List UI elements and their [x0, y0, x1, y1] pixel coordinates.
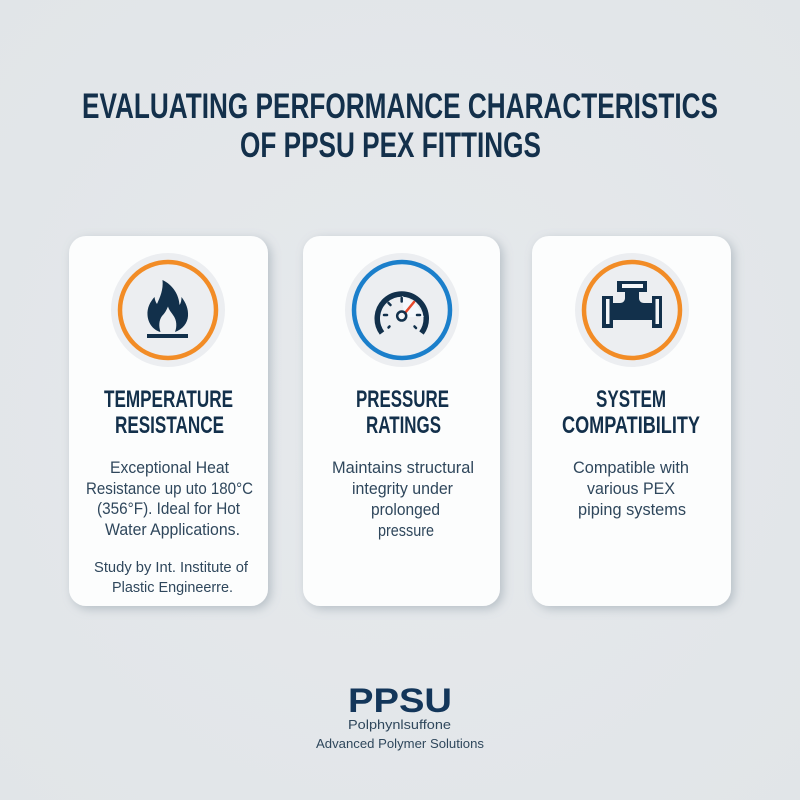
heading — [104, 386, 233, 439]
panel: pressure ratings — [303, 236, 500, 606]
heading: TEMPERATURE — [104, 386, 233, 413]
heading: RATINGS — [366, 412, 441, 439]
description: prolonged — [371, 500, 440, 519]
card background — [69, 236, 268, 606]
description: Compatible with — [573, 458, 689, 477]
panel: temperature resistance — [69, 236, 268, 606]
description — [332, 458, 474, 540]
heading: SYSTEM — [596, 386, 666, 413]
title — [82, 86, 718, 165]
icon: pipe tee fitting in orange ring — [575, 253, 689, 367]
heading — [356, 386, 449, 439]
description: Maintains structural — [332, 458, 474, 477]
study note — [94, 559, 249, 596]
card background — [303, 236, 500, 606]
heading: COMPATIBILITY — [562, 412, 700, 439]
material name: Polphynlsuffone — [348, 717, 451, 732]
icon: pressure gauge in blue ring — [345, 253, 459, 367]
panel: system compatibility — [532, 236, 731, 606]
description: Exceptional Heat — [110, 458, 229, 477]
description: integrity under — [352, 479, 453, 498]
description: Resistance up uto 180°C — [86, 479, 253, 498]
description: (356°F). Ideal for Hot — [97, 499, 240, 518]
description: various PEX — [587, 479, 675, 498]
heading — [562, 386, 700, 439]
description — [86, 458, 253, 539]
heading: RESISTANCE — [115, 412, 224, 439]
description: piping systems — [578, 500, 686, 519]
title: OF PPSU PEX FITTINGS — [240, 125, 541, 165]
heading: PRESSURE — [356, 386, 449, 413]
description: pressure — [378, 521, 434, 540]
logo wordmark: PPSU — [348, 682, 452, 720]
card background — [532, 236, 731, 606]
icon: flame in orange ring — [111, 253, 225, 367]
footer logo block — [316, 682, 485, 751]
study note: Plastic Engineerre. — [112, 579, 233, 596]
study note: Study by Int. Institute of — [94, 559, 249, 576]
description: Water Applications. — [105, 520, 240, 539]
tagline: Advanced Polymer Solutions — [316, 736, 485, 751]
description — [573, 458, 689, 519]
